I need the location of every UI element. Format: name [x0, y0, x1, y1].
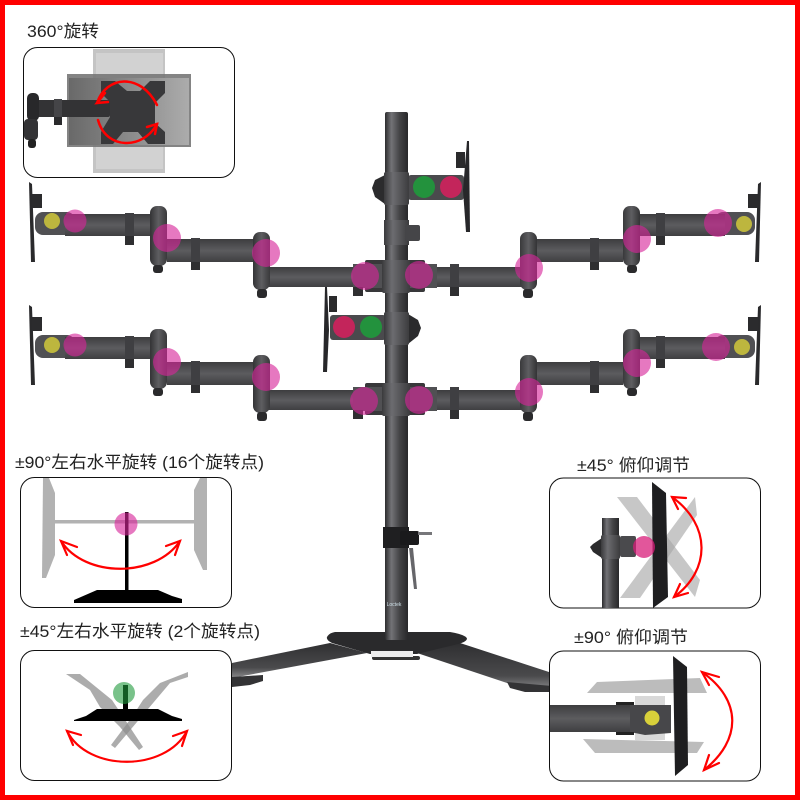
right lower arm — [405, 305, 761, 421]
rotation arrows — [97, 81, 157, 143]
pole brand text: Loctek — [387, 602, 402, 608]
panel frame — [20, 650, 232, 780]
label: horizontal 90: ±90°左右水平旋转 (16个旋转点) — [15, 453, 264, 472]
left lower arm — [29, 305, 385, 421]
red arrow — [67, 731, 187, 762]
pink pivots right lower — [405, 333, 730, 414]
pink pivots left lower — [64, 334, 378, 415]
upper pole collar — [384, 220, 420, 245]
red arrow — [702, 672, 732, 770]
panel frame — [24, 48, 234, 178]
pink pivot — [633, 536, 655, 558]
panel: horizontal 45 — [20, 650, 232, 780]
black monitor — [673, 656, 688, 776]
left upper arm — [29, 182, 385, 298]
panel frame — [20, 478, 232, 608]
upper front mount — [372, 141, 470, 232]
red arrow — [672, 497, 702, 597]
label: tilt 45: ±45° 俯仰调节 — [577, 456, 690, 475]
gray monitors — [42, 478, 207, 578]
pole and base stand — [232, 112, 552, 692]
panel frame — [550, 651, 760, 781]
green pivot — [113, 682, 135, 704]
label: 360 rotation: 360°旋转 — [27, 22, 99, 41]
pink pivots right upper — [405, 209, 732, 289]
panel: tilt 45 — [550, 478, 760, 608]
base left leg — [232, 643, 367, 687]
collar knob handle — [400, 531, 432, 589]
arm — [550, 705, 630, 732]
pink pivots left upper — [64, 210, 379, 290]
pink pivot — [114, 512, 138, 536]
lower height collar — [383, 527, 409, 548]
base white strip — [371, 651, 420, 660]
black base — [74, 709, 182, 721]
panel: horizontal 90 — [20, 478, 232, 608]
upper hub clamp — [353, 260, 459, 296]
ghost plates — [583, 678, 707, 753]
lower hub clamp — [353, 383, 459, 419]
gray monitors crossing — [617, 497, 700, 598]
bracket — [616, 702, 671, 735]
arm — [24, 93, 110, 148]
VESA plate — [101, 81, 165, 144]
main pole — [385, 112, 408, 640]
lower front mount — [323, 287, 421, 372]
gray monitors crossing — [66, 672, 188, 750]
black monitor — [652, 482, 668, 608]
red pivots — [333, 176, 462, 338]
clamp and bracket — [590, 535, 636, 559]
green pivots — [360, 176, 435, 338]
portrait monitor ghost — [93, 49, 165, 173]
black stand — [74, 512, 182, 603]
panel: tilt 90 — [550, 651, 760, 781]
label: tilt 90: ±90° 俯仰调节 — [574, 628, 688, 647]
label: horizontal 45: ±45°左右水平旋转 (2个旋转点) — [20, 622, 260, 641]
stand neck — [123, 685, 128, 710]
pivot markers — [44, 176, 752, 415]
landscape monitor ghost — [67, 74, 191, 147]
pole — [602, 518, 619, 608]
base centre plate — [327, 632, 467, 654]
yellow pivot — [644, 710, 660, 726]
red arrow — [61, 541, 180, 569]
right upper arm — [405, 182, 761, 298]
base right leg — [417, 643, 552, 692]
yellow pivots — [44, 213, 752, 355]
panel: 360 rotation — [24, 48, 234, 178]
panel frame — [550, 478, 760, 608]
